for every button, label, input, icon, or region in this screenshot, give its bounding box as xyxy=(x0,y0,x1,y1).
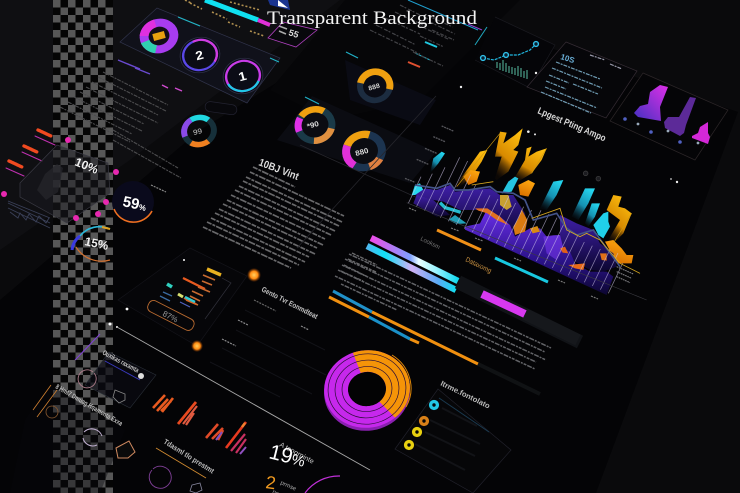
score card xyxy=(268,22,317,47)
donut: top xyxy=(357,68,393,104)
checkerboard transparency strip xyxy=(53,0,113,493)
panel: small bar chart card: 87% xyxy=(161,309,179,324)
panel: lower left card xyxy=(75,334,156,408)
table block top right xyxy=(370,0,482,67)
donut: small mid left xyxy=(181,114,217,148)
big donut chart xyxy=(323,349,411,429)
donut: middle left xyxy=(295,105,335,145)
heading: text block title: 10BJ Vint xyxy=(257,157,301,183)
gauge 59 percent: 59% xyxy=(121,193,148,215)
stat: 19 percent: 19% xyxy=(267,441,308,472)
horizontal progress bars xyxy=(367,230,580,342)
small purple bars chart xyxy=(610,73,728,160)
red mini chart labels xyxy=(6,130,55,176)
panel: lower bottom strip xyxy=(10,384,202,493)
text block: right of central xyxy=(341,253,377,281)
top progress strip xyxy=(185,0,290,36)
head map panel xyxy=(1,137,119,228)
gauge 15 percent xyxy=(72,227,110,261)
slanted grid lines xyxy=(408,157,623,293)
stat: 19 percent: A tengrpinte xyxy=(278,442,315,466)
score card: 55 xyxy=(287,27,300,40)
donut: small mid left: 99 xyxy=(192,126,203,137)
donut: top: 888 xyxy=(368,83,381,92)
ring chart 1 xyxy=(141,19,177,53)
text block: left top paragraph xyxy=(60,60,182,178)
heading: main chart title: Lpgest Pting Ampo xyxy=(536,106,607,144)
text card top right: 10S xyxy=(559,52,576,65)
donut: middle left: *90 xyxy=(306,119,320,131)
gold bars xyxy=(455,128,633,263)
main chart xyxy=(405,126,647,300)
ring chart 2: 2 xyxy=(194,48,205,63)
gauge 15 percent: 15% xyxy=(83,234,110,253)
cyan bars xyxy=(412,152,610,238)
line chart top right xyxy=(475,17,555,88)
orange highlights xyxy=(475,195,607,270)
legend panel xyxy=(395,379,511,493)
gauge 59 percent xyxy=(112,181,166,223)
chart axis labels and dots xyxy=(409,72,678,299)
text card top right xyxy=(527,42,637,118)
panel: lower left card: Ouxikas raxamta xyxy=(101,350,140,375)
ring chart 2 xyxy=(176,33,224,77)
heading: lower block: Gento Tvr Eonmdteat xyxy=(260,285,320,321)
stat: orange 2 xyxy=(264,472,297,493)
ring chart 3: 1 xyxy=(237,69,248,84)
heading: bottom mid: Tdasml tlo prestmt xyxy=(162,437,216,476)
small bar clusters xyxy=(153,395,246,454)
glow dots xyxy=(108,259,261,352)
donut: middle right xyxy=(342,130,386,172)
orange bar xyxy=(437,230,481,250)
baseline xyxy=(407,203,647,300)
title: Transparent Background xyxy=(267,8,478,29)
legend panel: Itrme.fontolato xyxy=(439,379,492,411)
text block: long paragraph xyxy=(335,254,551,369)
panel: middle donuts xyxy=(277,52,436,183)
horizontal progress bars: Dataxomg xyxy=(464,257,492,275)
panel divider lines xyxy=(297,96,440,248)
trend lines xyxy=(415,183,620,267)
thin multi-colour bars xyxy=(329,291,540,394)
stat: 10% xyxy=(73,155,101,177)
text block: central paragraph xyxy=(203,167,344,268)
stat: orange 2: prmse xyxy=(279,480,297,493)
long white divider line xyxy=(117,327,370,470)
stat: orange 2: 2 xyxy=(264,472,277,493)
purple area xyxy=(413,185,617,295)
donut: middle right: 880 xyxy=(354,146,369,158)
white node dots xyxy=(527,130,536,135)
chart small icons xyxy=(583,171,588,176)
small control pill xyxy=(204,101,238,115)
cyan bar xyxy=(495,258,548,282)
magenta arc gauge xyxy=(305,476,340,493)
form fields xyxy=(210,300,326,397)
panel: lower bottom strip: 8 Hmt7 Dmuag Hqamenta Exxa xyxy=(54,384,123,428)
ring chart 3 xyxy=(219,54,267,98)
panel: small bar chart card xyxy=(118,248,247,346)
y axis labels xyxy=(405,126,453,182)
legend icons xyxy=(406,402,437,448)
horizontal progress bars: Looksm xyxy=(419,236,441,251)
panel: top rings xyxy=(120,8,280,103)
magenta markers xyxy=(1,137,119,221)
